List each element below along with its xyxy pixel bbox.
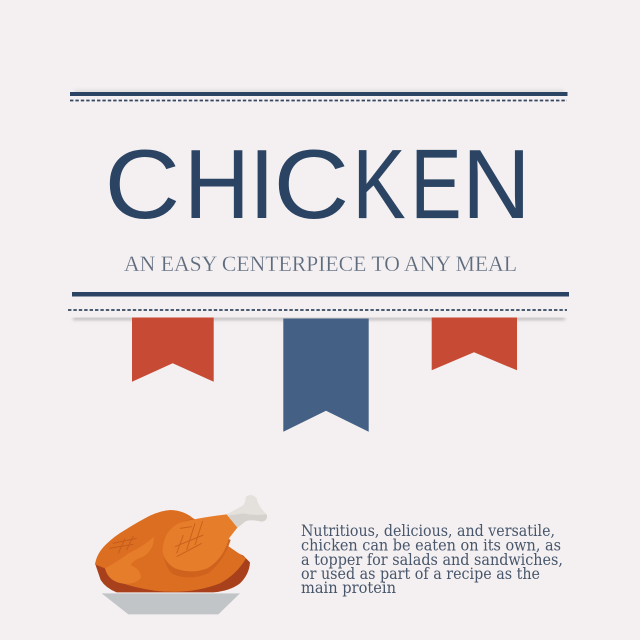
drumstick score marks — [175, 521, 203, 557]
description text: Nutritious, delicious, and versatile, — [301, 522, 555, 540]
flag: center blue — [283, 318, 369, 432]
title: H — [184, 130, 250, 240]
flag: right red — [432, 318, 517, 370]
plate — [102, 593, 240, 614]
title: N — [462, 131, 531, 239]
title: C — [274, 129, 349, 239]
title — [104, 129, 531, 240]
subtitle: AN EASY CENTERPIECE TO ANY MEAL — [124, 251, 517, 276]
roast underside — [95, 542, 250, 592]
bunting flags — [132, 318, 517, 432]
roast body — [95, 510, 246, 592]
wing — [105, 537, 154, 584]
thigh shadow — [163, 518, 231, 577]
header top rules — [70, 90, 568, 100]
wing score marks — [109, 536, 137, 553]
description text: a topper for salads and sandwiches, — [301, 551, 563, 569]
icon: roast chicken on a plate — [95, 495, 267, 614]
bone — [227, 495, 267, 528]
description text: chicken can be eaten on its own, as — [301, 536, 561, 554]
title: K — [352, 129, 405, 239]
description text — [301, 522, 563, 597]
description text: main protein — [301, 579, 396, 597]
drumstick — [163, 514, 237, 571]
header bottom rules — [60, 292, 580, 320]
title: I — [249, 130, 275, 240]
description text: or used as part of a recipe as the — [301, 565, 540, 583]
title: C — [104, 129, 180, 239]
flag: left red — [132, 318, 214, 382]
title: E — [410, 129, 461, 239]
